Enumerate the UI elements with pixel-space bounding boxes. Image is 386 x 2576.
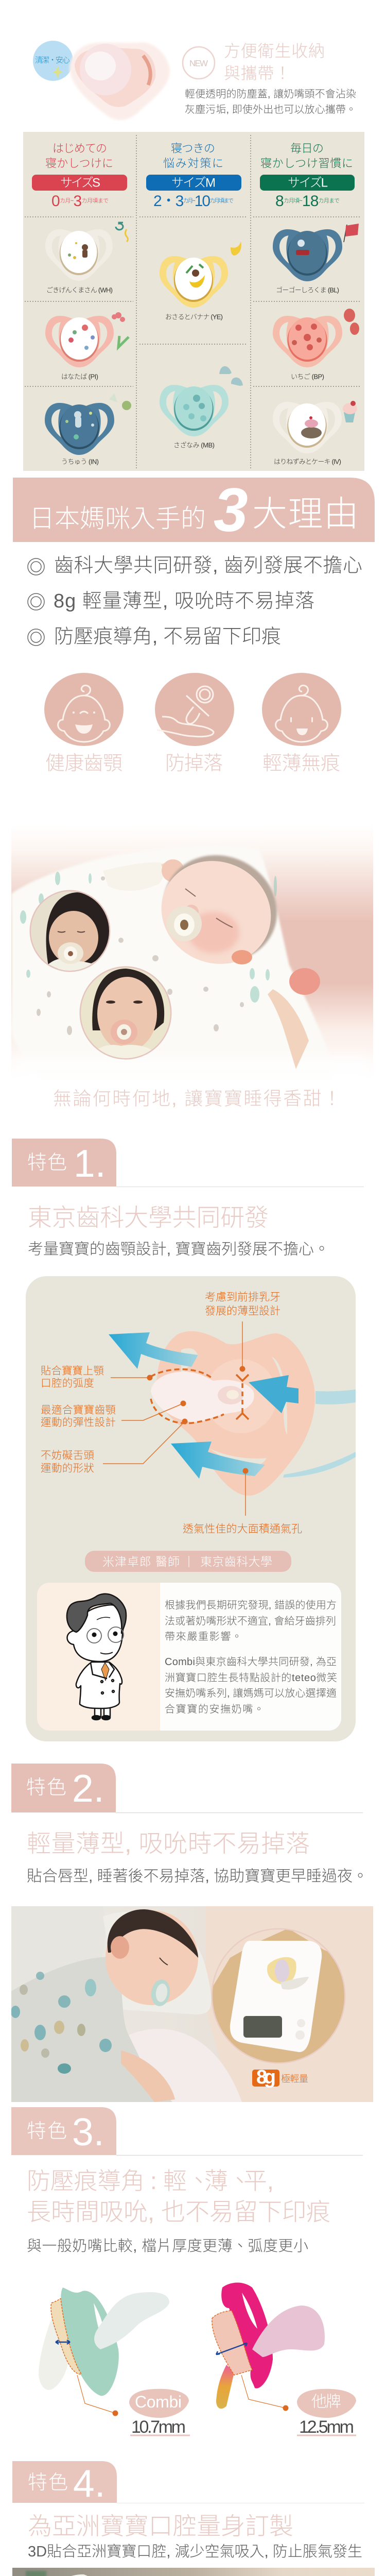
feature 4 subtitle: 3D貼合亞洲寶寶口腔, 減少空氣吸入, 防止脹氣發生	[28, 2543, 362, 2560]
label: Combi 10.7mm	[129, 2389, 190, 2437]
feature 3 tab	[11, 2107, 363, 2156]
feature 2 tab: 2.	[72, 1767, 104, 1810]
badge: NEW: NEW	[189, 59, 208, 68]
icon labels: 健康齒顎	[45, 753, 122, 774]
light arrow tails	[283, 1389, 356, 1478]
doctor statement: 帶來嚴重影響。	[165, 1631, 242, 1642]
icon labels	[45, 753, 340, 774]
column heading: size S: 寝かしつけに	[45, 157, 113, 170]
reason 2: 8g 輕量薄型, 吸吮時不易掉落	[54, 590, 314, 612]
icon labels: 防掉落	[165, 753, 223, 774]
scale inset	[212, 1928, 345, 2063]
badge: 8g: 8g	[256, 2066, 276, 2088]
callouts: 不妨礙舌頭	[41, 1450, 94, 1461]
headline: 方便衛生收納	[224, 42, 325, 60]
badge: clean and safe: 清潔‧安心	[35, 56, 70, 65]
doctor illustration	[67, 1594, 126, 1720]
pacifier cover	[69, 42, 170, 120]
feature 2 tab: 特色	[26, 1777, 66, 1799]
icon labels: 輕薄無痕	[262, 753, 340, 774]
baby body	[11, 1957, 175, 2102]
column heading: size S: サイズS	[60, 176, 100, 190]
product: pacifier with dust cover	[33, 41, 170, 120]
column heading: size L: 寝かしつけ習慣に	[260, 157, 353, 170]
pacifier: IV: はりねずみとケーキ (IV)	[274, 457, 341, 466]
column heading: size M: サイズM	[171, 176, 216, 190]
column heading: size M	[146, 142, 241, 209]
column heading: size S: 0カ月~3カ月頃まで	[51, 193, 109, 209]
reasons list	[28, 555, 362, 648]
feature 3 tab: 特色	[27, 2121, 67, 2142]
baby pacifier	[167, 906, 202, 941]
comparison: Combi pacifier	[39, 2287, 169, 2416]
doctor statement: 法或著奶嘴形狀不適宜, 會給牙齒排列	[165, 1615, 336, 1627]
label: Combi 10.7mm: Combi	[135, 2393, 182, 2411]
pacifier: BP	[273, 309, 359, 380]
reason 3: 防壓痕導角, 不易留下印痕	[54, 626, 281, 648]
feature 3 heading	[27, 2167, 330, 2226]
new badge and headline	[183, 42, 356, 115]
feature 4 tab	[12, 2461, 364, 2505]
pacifier shield	[156, 1331, 315, 1496]
doctor statement: 根據我們長期研究發現, 錯誤的使用方	[165, 1599, 337, 1611]
label: other brand 12.5mm: 他牌	[311, 2394, 341, 2410]
dashed outlines	[151, 1369, 249, 1423]
caption: 無論何時何地, 讓寶寶睡得香甜！	[53, 1088, 341, 1109]
callouts	[41, 1291, 302, 1535]
doctor name pill	[85, 1551, 291, 1572]
feature 1 tab	[12, 1139, 364, 1187]
pacifier: MB: さざなみ (MB)	[173, 441, 215, 449]
baby hand	[268, 968, 320, 1069]
column heading: size L: 毎日の	[290, 142, 324, 155]
doctor name pill: 米津卓郎 醫師	[102, 1555, 180, 1568]
doctor statement: 合寶寶的安撫奶嘴。	[165, 1703, 264, 1715]
pacifier: YE: おさるとバナナ (YE)	[165, 313, 223, 320]
feature 4 tab: 4.	[73, 2462, 106, 2505]
comparison: other brand pacifier	[212, 2283, 325, 2411]
label: other brand 12.5mm	[297, 2389, 356, 2437]
callouts: 最適合寶寶齒顎	[41, 1404, 116, 1416]
panel: size chart	[23, 132, 364, 471]
pacifier: IN	[45, 393, 131, 466]
feature 3 heading: 平	[243, 2167, 267, 2194]
baby head	[106, 1909, 198, 2007]
leader lines and dots	[103, 1321, 245, 1516]
heading band: three reasons: 日本媽咪入手的	[29, 505, 206, 533]
pacifier: BL: ゴーゴーしろくま (BL)	[276, 286, 339, 294]
pacifier: BP: いちご (BP)	[291, 373, 324, 380]
feature 3 heading: 輕	[163, 2167, 187, 2194]
heading band: three reasons: 大理由	[252, 495, 359, 534]
nipple	[151, 1371, 254, 1422]
inset portrait 1	[30, 891, 111, 971]
feature 1 tab: 特色	[27, 1152, 67, 1174]
description: 輕便透明的防塵蓋, 讓奶嘴頭不會沾染	[185, 88, 356, 100]
feature 1 tab: 1.	[74, 1142, 106, 1185]
label: other brand 12.5mm: 12.5mm	[299, 2417, 354, 2437]
blue arrows	[109, 1332, 299, 1479]
callouts: 透氣性佳的大面積通氣孔	[183, 1523, 302, 1535]
feature 4 heading: 為亞洲寶寶口腔量身訂製	[28, 2512, 293, 2540]
photo: sleeping baby with inset portraits	[11, 840, 373, 1069]
feature 3 subtitle: 與一般奶嘴比較, 檔片厚度更薄、弧度更小	[27, 2238, 308, 2255]
callouts: 考慮到前排乳牙	[205, 1291, 280, 1303]
panel: pacifier anatomy	[26, 1276, 356, 1741]
icon: no marks	[262, 673, 341, 746]
photo: baby with Asian and Western mouth comparison	[12, 2568, 375, 2576]
description	[185, 88, 356, 115]
feature 3 heading: 防壓痕導角	[27, 2167, 145, 2194]
pacifier: YE	[160, 241, 241, 320]
feature 3 heading: 長時間吸吮, 也不易留下印痕	[27, 2198, 330, 2226]
column heading: size M: 寝つきの	[171, 142, 215, 155]
column heading: size M: 悩み対策に	[163, 157, 223, 170]
doctor name pill: 東京齒科大學	[200, 1555, 272, 1568]
feature 2 tab	[11, 1764, 363, 1812]
badge: 8g: 極輕量	[281, 2074, 308, 2084]
column heading: size L: サイズL	[288, 176, 328, 190]
icon: anti-drop pacifier and hand	[155, 673, 234, 746]
badge: clean and safe	[33, 41, 73, 81]
column heading: size M: 2‧3カ月~10カ月頃まで	[153, 193, 234, 209]
feature 3 heading: 、	[187, 2167, 210, 2194]
callouts: 運動的彈性設計	[41, 1417, 116, 1428]
doctor card	[37, 1583, 341, 1731]
headline: 與攜帶！	[224, 64, 291, 82]
feature 3 tab: 3.	[72, 2110, 104, 2154]
pacifier: PI: はなたば (PI)	[61, 373, 98, 380]
feature 2 heading: 輕量薄型, 吸吮時不易掉落	[27, 1830, 310, 1857]
callouts: 運動的形狀	[41, 1462, 94, 1475]
doctor statement: Combi與東京齒科大學共同研發, 為亞	[165, 1656, 337, 1668]
column heading: size L: 8カ月頃~18カ月まで	[275, 193, 340, 209]
callouts: 貼合寶寶上顎	[41, 1365, 104, 1377]
heading band: three reasons	[13, 476, 375, 545]
feature 3 heading: :	[150, 2167, 157, 2194]
feature 3 heading: 薄	[204, 2167, 228, 2194]
column heading: size L	[260, 142, 355, 209]
badge: NEW	[183, 47, 215, 79]
pacifier: MB	[160, 366, 243, 449]
feature 1 subtitle: 考量寶寶的齒顎設計, 寶寶齒列發展不擔心。	[28, 1241, 329, 1258]
callouts: 發展的薄型設計	[205, 1306, 280, 1317]
photo: baby and scale	[11, 1906, 373, 2102]
label: Combi 10.7mm: 10.7mm	[131, 2417, 186, 2437]
feature 4 tab: 特色	[28, 2472, 68, 2494]
pacifier: BL	[273, 224, 359, 294]
pacifier: WH	[45, 223, 128, 294]
feature 3 heading: ,	[267, 2167, 274, 2194]
doctor statement: 洲寶寶口腔生長特點設計的teteo微笑	[165, 1672, 337, 1684]
headline	[224, 42, 325, 82]
column heading: size S	[32, 142, 127, 209]
feature 2 subtitle: 貼合唇型, 睡著後不易掉落, 協助寶寶更早睡過夜。	[27, 1868, 368, 1885]
heading band: three reasons: 3	[214, 476, 248, 545]
pacifier: WH: ごきげんくまさん (WH)	[46, 286, 113, 294]
feature 3 heading: 、	[228, 2167, 252, 2194]
inset portrait 2	[80, 967, 172, 1061]
feature 1 heading: 東京齒科大學共同研發	[28, 1204, 269, 1231]
pacifier: IN: うちゅう (IN)	[61, 457, 99, 466]
badge: 8g	[252, 2070, 308, 2088]
description: 灰塵污垢, 即使外出也可以放心攜帶。	[185, 104, 356, 115]
reason 1: 齒科大學共同研發, 齒列發展不擔心	[54, 555, 362, 577]
baby head	[162, 854, 278, 964]
doctor statement: 安撫奶嘴系列, 讓媽媽可以放心選擇適	[165, 1687, 337, 1699]
callouts: 口腔的弧度	[41, 1378, 94, 1389]
doctor statement	[165, 1599, 337, 1715]
column heading: size S: はじめての	[52, 142, 107, 155]
icon: healthy gums	[44, 673, 124, 746]
pacifier: PI	[45, 312, 129, 380]
pacifier: IV	[273, 401, 357, 466]
